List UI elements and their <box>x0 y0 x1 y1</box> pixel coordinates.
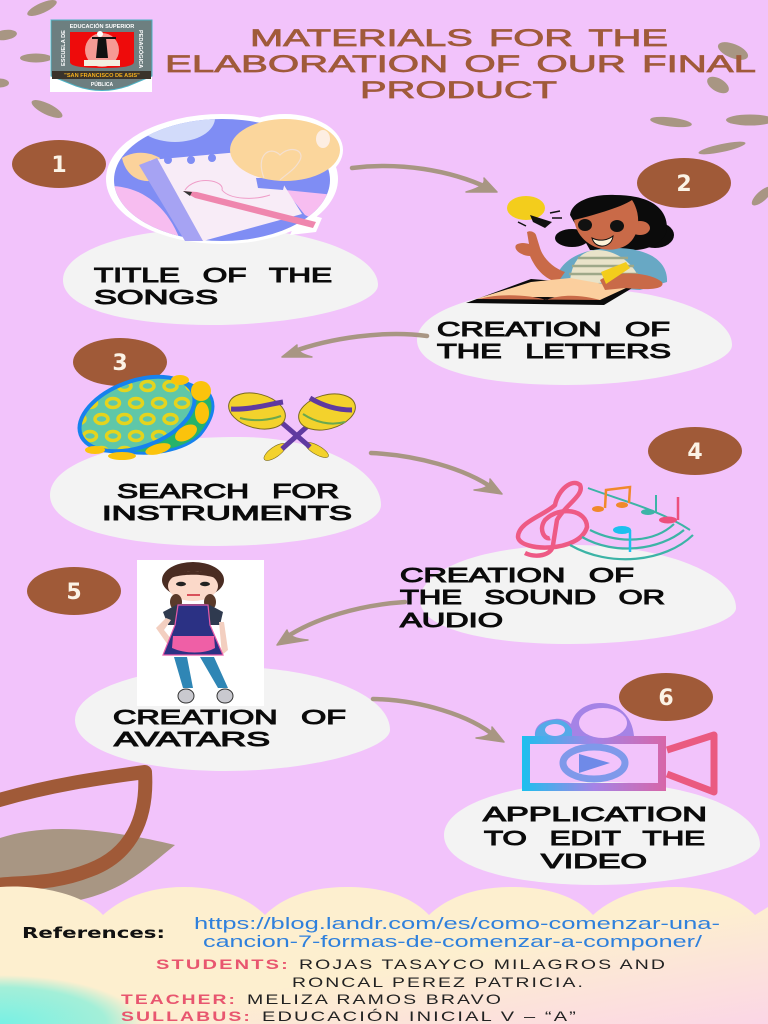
label: step 5: AVATARS <box>114 729 270 751</box>
leaf decoration <box>0 772 175 900</box>
title: MATERIALS FOR THE <box>250 25 668 52</box>
title: PRODUCT <box>360 77 558 104</box>
reference link: cancion-7-formas-de-comenzar-a-componer/ <box>203 932 702 951</box>
credits: RONCAL PEREZ PATRICIA. <box>292 974 585 990</box>
number badge 1: 1 <box>51 153 67 178</box>
icon: tambourine <box>78 374 214 460</box>
number badge 3 <box>73 338 167 386</box>
school logo: ESCUELA DE <box>61 30 67 66</box>
label: step 2: THE LETTERS <box>437 341 671 363</box>
panel: step 2 blob <box>417 288 732 385</box>
credits: MELIZA RAMOS BRAVO <box>247 991 503 1007</box>
number badge 5 <box>27 567 121 615</box>
icon: maracas <box>225 387 359 464</box>
number badge 2 <box>637 158 731 208</box>
title: ELABORATION OF OUR FINAL <box>165 51 756 78</box>
number badge 4 <box>648 427 742 475</box>
label: step 1: TITLE OF THE <box>94 265 332 287</box>
reference link <box>194 914 720 951</box>
reference link: https://blog.landr.com/es/como-comenzar-una- <box>194 914 720 933</box>
credits: TEACHER: <box>121 991 237 1007</box>
number badge 4: 4 <box>687 440 703 465</box>
label: step 6 <box>483 804 707 873</box>
label: step 2: CREATION OF <box>437 319 670 341</box>
label: step 6: VIDEO <box>541 851 647 873</box>
school logo: PEDAGÓGICA <box>137 30 145 68</box>
label: step 3: INSTRUMENTS <box>102 503 352 525</box>
school logo: PÚBLICA <box>91 81 113 88</box>
icon: avatar <box>137 560 264 706</box>
number badge 6 <box>619 673 713 721</box>
label: step 4: CREATION OF <box>400 565 634 587</box>
number badge 2: 2 <box>676 172 692 197</box>
credits: SULLABUS: <box>121 1008 252 1024</box>
panel: step 3 blob <box>50 437 381 546</box>
credits <box>121 956 667 1024</box>
panel: step 4 blob <box>420 545 736 644</box>
label: step 6: APPLICATION <box>483 804 707 826</box>
arrow 5 to 6 <box>373 699 504 742</box>
arrow 1 to 2 <box>352 166 497 192</box>
label: step 3: SEARCH FOR <box>117 481 339 503</box>
icon: notebook and light bulb <box>106 114 343 244</box>
label: step 2 <box>437 319 671 363</box>
number badge 6: 6 <box>658 686 674 711</box>
credits: ROJAS TASAYCO MILAGROS AND <box>299 956 667 972</box>
label: step 3 <box>102 481 352 525</box>
label: step 4 <box>400 565 665 632</box>
panel: step 6 blob <box>444 782 760 885</box>
number badge 3: 3 <box>112 351 128 376</box>
school logo: EDUCACIÓN SUPERIOR <box>70 22 134 30</box>
label: step 4: THE SOUND OR <box>400 587 665 609</box>
number badge 1 <box>12 140 106 188</box>
icon: girl with light bulb and book <box>466 195 674 305</box>
icon: music notes <box>518 483 693 559</box>
icon: video camera <box>522 703 714 792</box>
label: step 1: SONGS <box>94 287 218 309</box>
label: step 1 <box>94 265 332 309</box>
arrow 2 to 3 <box>282 334 427 357</box>
credits: EDUCACIÓN INICIAL V – “A” <box>262 1008 578 1024</box>
panel: step 1 blob <box>63 228 378 325</box>
label: step 4: AUDIO <box>400 610 503 632</box>
label: step 5 <box>113 707 346 751</box>
school logo: "SAN FRANCISCO DE ASIS" <box>64 73 140 79</box>
school logo <box>50 20 152 92</box>
number badge 5: 5 <box>66 580 82 605</box>
references label: References: <box>22 924 165 942</box>
footer scalloped panel <box>0 887 768 1024</box>
panel: step 5 blob <box>75 667 390 771</box>
title <box>165 25 756 104</box>
arrow 3 to 4 <box>371 453 502 494</box>
arrow 4 to 5 <box>277 602 405 645</box>
label: step 6: TO EDIT THE <box>484 828 705 850</box>
decorative dashes <box>0 0 768 208</box>
credits: STUDENTS: <box>156 956 290 972</box>
label: step 5: CREATION OF <box>113 707 346 729</box>
